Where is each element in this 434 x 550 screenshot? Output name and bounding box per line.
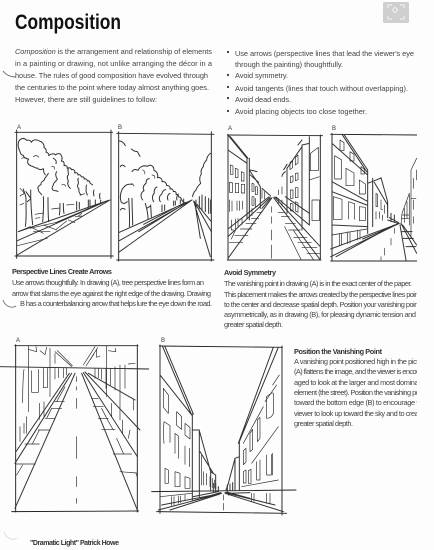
section 3 text: position the vanishing point: greater spatial depth. [294, 419, 353, 428]
guideline bullet list: through the painting) thoughtfully. [235, 60, 343, 69]
guideline bullet list: Avoid tangents (lines that touch without overlapping). [235, 84, 408, 93]
intro paragraph: However, there are still guidelines to follow: [15, 95, 157, 104]
section 2 text: avoid symmetry: asymmetrically, as in drawing (B), for pleasing dynamic tension and [224, 310, 416, 319]
guideline bullet list: Use arrows (perspective lines that lead the viewer's eye [235, 49, 414, 58]
drawing 3B: low vanishing point [152, 338, 296, 515]
section 3 text: position the vanishing point: element (the street). Position the vanishing point [294, 388, 426, 397]
drawing 3A: high vanishing point: A [16, 338, 20, 344]
guideline bullet list: Avoid dead ends. [235, 95, 291, 104]
guideline bullet list: Avoid placing objects too close together. [235, 107, 367, 116]
section 1 text: perspective lines: arrow that slams the eye against the right edge of the drawing. Drawing [12, 289, 211, 298]
intro paragraph [15, 47, 213, 104]
section 2 text: avoid symmetry [224, 268, 420, 329]
drawing 3A: high vanishing point [0, 338, 149, 512]
drawing 2A: symmetric street: A [228, 126, 232, 132]
section 3 text: position the vanishing point: Position the Vanishing Point [294, 347, 383, 356]
section 2 text: avoid symmetry: to the center and decrease spatial depth. Position your vanishing point [224, 300, 420, 309]
binder hole smudges [3, 71, 17, 539]
section 2 text: avoid symmetry: The vanishing point in drawing (A) is in the exact center of the paper. [224, 279, 412, 288]
section 1 text: perspective lines [12, 267, 212, 308]
section 1 text: perspective lines: B has a counterbalancing arrow that helps lure the eye down the road. [20, 299, 212, 308]
drawing 1A: trees with road hitting right edge: A [17, 125, 21, 131]
section 3 text: position the vanishing point: (A) flattens the image, and the viewer is encour- [294, 367, 425, 376]
section 1 text: perspective lines: Perspective Lines Create Arrows [12, 267, 112, 276]
section 2 text: avoid symmetry: This placement makes the arrows created by the perspective lines point [224, 290, 420, 299]
drawing 1B: trees with road down the centre: B [118, 125, 122, 131]
drawing 2B: off-centre vanishing point street [331, 126, 417, 261]
drawing 1A: trees with road hitting right edge [15, 125, 113, 258]
intro paragraph: Composition is the arrangement and relationship of elements [15, 47, 212, 56]
drawing 3B: low vanishing point: B [161, 338, 165, 344]
caption: "Dramatic Light" Patrick Howe [30, 540, 119, 547]
image expand icon [383, 2, 409, 23]
section 3 text: position the vanishing point: viewer to look up toward the sky and to create [294, 409, 424, 418]
section 2 text: avoid symmetry: Avoid Symmetry [224, 268, 277, 277]
section 3 text: position the vanishing point: A vanishing point positioned high in the picture [294, 357, 428, 366]
section 3 text: position the vanishing point: aged to look at the larger and most dominant [294, 378, 424, 387]
section 3 text: position the vanishing point [294, 348, 417, 428]
guideline bullet list [227, 49, 414, 116]
intro paragraph: house. The rules of good composition have evolved through [15, 71, 208, 80]
guideline bullet list: Avoid symmetry. [235, 71, 288, 80]
title: Composition [15, 11, 121, 34]
section 3 text: position the vanishing point: toward the bottom edge (B) to encourage the [294, 398, 426, 407]
section 1 text: perspective lines: Use arrows thoughtfully. In drawing (A), tree perspective lines form an [12, 278, 204, 287]
drawing 1B: trees with road down the centre [117, 125, 214, 261]
section 2 text: avoid symmetry: greater spatial depth. [224, 320, 283, 329]
intro paragraph: the centuries to the point where today almost anything goes. [15, 83, 209, 92]
intro paragraph: in a painting or drawing, not unlike arranging the décor in a [15, 59, 213, 68]
drawing 2B: off-centre vanishing point street: B [332, 126, 336, 132]
drawing 2A: symmetric street [227, 126, 323, 260]
